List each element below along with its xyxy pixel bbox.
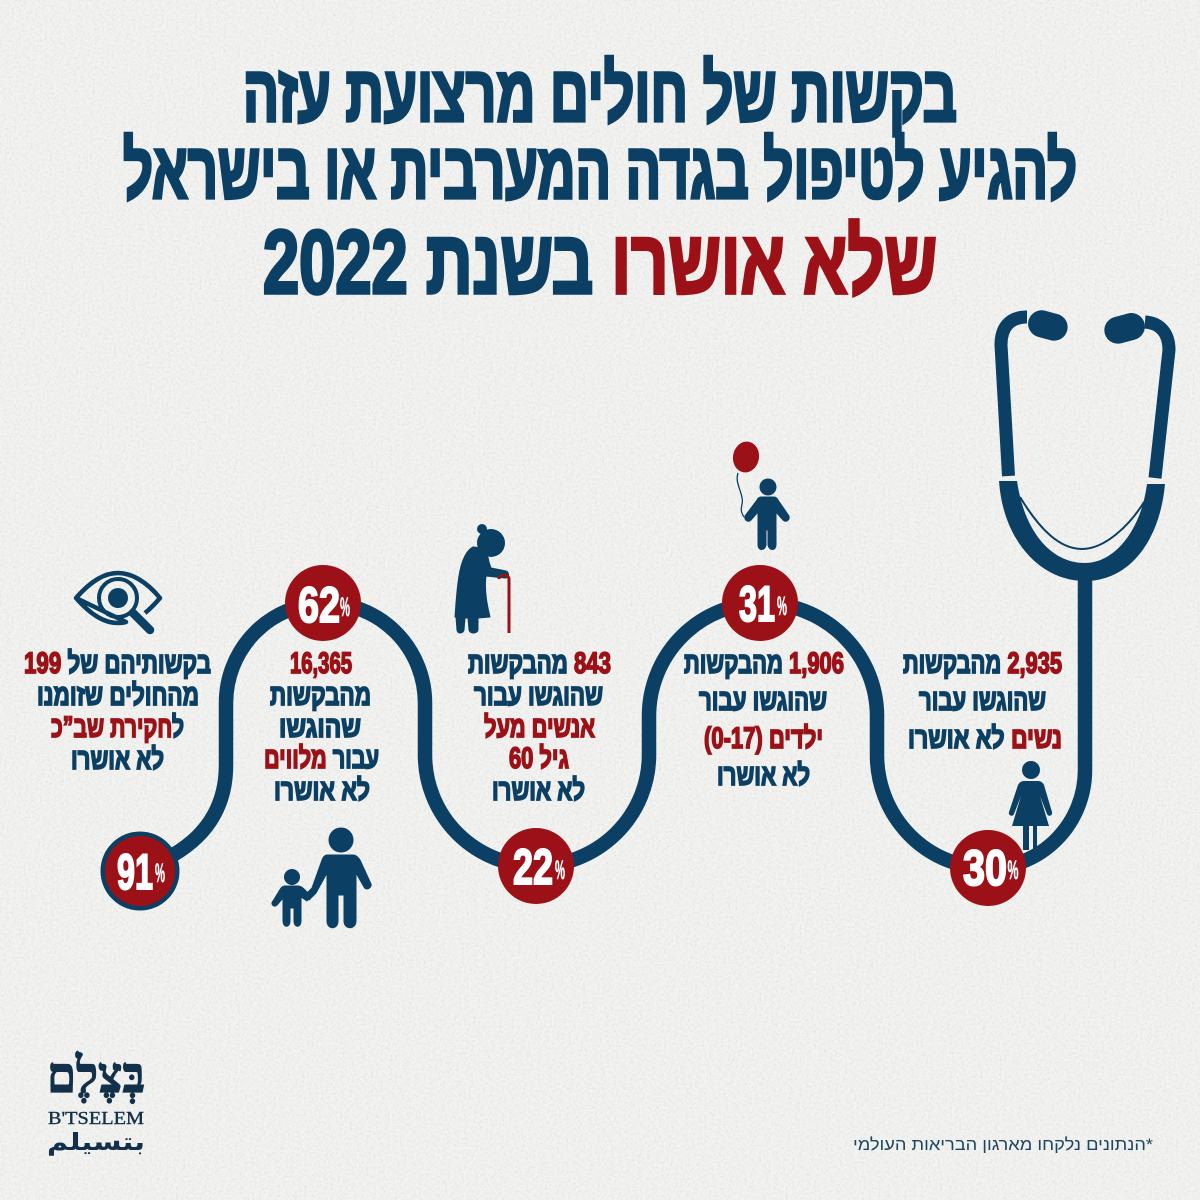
percentage circle 31: %	[777, 591, 787, 621]
percentage circle 30: 30	[963, 840, 1007, 896]
right ear tube	[1145, 322, 1169, 478]
text block: people over 60: לא אושרו	[492, 774, 585, 807]
text block: women	[903, 647, 1062, 755]
title	[123, 49, 1077, 313]
percentage circle 62: 62	[298, 577, 340, 633]
text block: women: נשים לא אושרו	[908, 722, 1062, 755]
logo: B'Tselem	[47, 1047, 145, 1156]
icon: woman	[1009, 761, 1052, 852]
text block: children	[684, 647, 844, 792]
text block: Shin Bet interrogation: מהחולים שזומנו	[37, 679, 199, 712]
title line 3 with red emphasis: שלא אושרו בשנת 2022	[263, 213, 937, 313]
text block: children: 1,906 מהבקשות	[684, 647, 844, 680]
percentage circle 31	[722, 565, 798, 641]
text block: escorts: עבור מלווים	[264, 742, 379, 775]
percentage circle 62: %	[340, 592, 350, 622]
text block: women: שהוגשו עבור	[919, 684, 1046, 717]
percentage circle 22	[498, 828, 574, 904]
percentage circle 22: 22	[513, 839, 553, 895]
left ear tip	[1025, 307, 1071, 344]
text block: escorts: שהוגשו	[279, 711, 361, 744]
text block: people over 60: אנשים מעל	[484, 711, 595, 744]
text block: escorts	[264, 647, 379, 807]
text block: people over 60: שהוגשו עבור	[474, 679, 603, 712]
percentage circle 31: 31	[739, 576, 775, 632]
percentage circle 91	[100, 832, 180, 910]
text block: Shin Bet interrogation	[24, 647, 211, 776]
text block: Shin Bet interrogation: בקשותיהם של 199	[24, 647, 211, 680]
text block: escorts: 16,365	[290, 647, 352, 680]
logo Latin: B'TSELEM	[48, 1108, 144, 1128]
logo Hebrew: בְּצֶלֶם	[47, 1047, 145, 1104]
text block: Shin Bet interrogation: לא אושרו	[71, 743, 164, 776]
percentage circle 30: %	[1008, 855, 1018, 885]
left ear tube	[1001, 317, 1027, 476]
text block: children: ילדים (0-17)	[704, 722, 823, 755]
text block: escorts: לא אושרו	[274, 774, 370, 807]
winding stethoscope tube	[140, 575, 1085, 871]
percentage circle 22: %	[555, 855, 565, 885]
text block: people over 60	[468, 647, 611, 807]
right ear tip	[1101, 310, 1148, 347]
spring line	[1020, 497, 1144, 549]
footnote: *הנתונים נלקחו מארגון הבריאות העולמי	[853, 1135, 1153, 1154]
percentage circle 91: %	[155, 858, 165, 888]
icon: child with balloon	[731, 439, 789, 550]
icon: eye with magnifier	[76, 573, 160, 630]
percentage circle 30	[950, 830, 1026, 906]
text block: people over 60: 843 מהבקשות	[468, 647, 611, 680]
text block: children: לא אושרו	[717, 759, 810, 792]
percentage circle 91: 91	[117, 844, 153, 900]
text block: escorts: מהבקשות	[270, 679, 371, 712]
logo Arabic: بتسيلم	[47, 1128, 145, 1156]
text block: women: 2,935 מהבקשות	[903, 647, 1062, 680]
text block: children: שהוגשו עבור	[699, 684, 827, 717]
icon: adult holding child's hand	[272, 828, 371, 928]
icon: elderly woman with cane	[455, 524, 509, 633]
stethoscope head	[999, 307, 1169, 581]
percentage circle 62	[285, 565, 361, 641]
text block: Shin Bet interrogation: לחקירת שב”כ	[51, 711, 184, 744]
U-shaped headset	[999, 481, 1165, 581]
text block: people over 60: גיל 60	[509, 742, 569, 775]
